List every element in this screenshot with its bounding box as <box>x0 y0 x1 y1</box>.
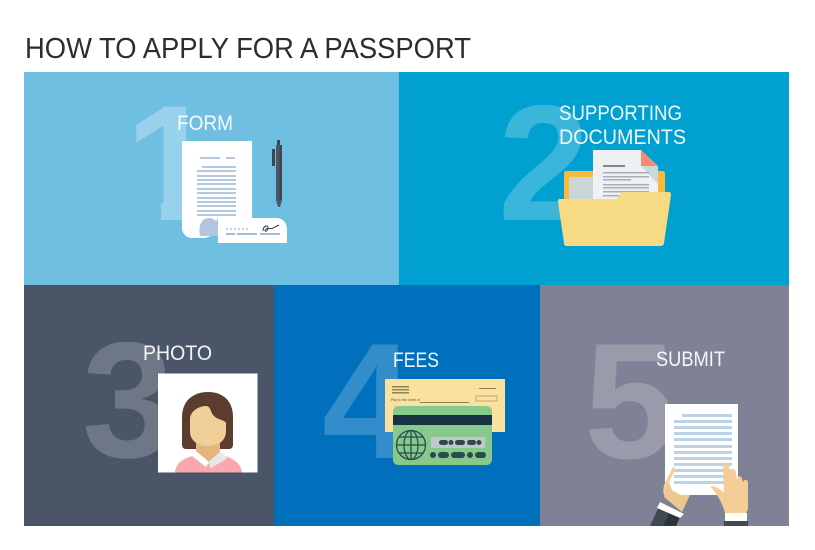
title: HOW TO APPLY FOR A PASSPORT <box>25 33 471 65</box>
icon: portrait photo <box>158 374 258 472</box>
heading: supporting documents <box>559 102 686 149</box>
number 5: 5 <box>584 309 676 493</box>
heading: supporting documents: SUPPORTING <box>559 102 682 125</box>
icon: form document <box>182 141 287 243</box>
icon: pen <box>272 140 282 210</box>
heading: fees: FEES <box>393 349 439 372</box>
icon: cheque: Pay to the order of <box>391 398 420 402</box>
panel: step 1 form <box>24 71 399 285</box>
heading: supporting documents: DOCUMENTS <box>559 126 686 149</box>
panel: step 2 supporting documents <box>399 71 789 285</box>
number 1: 1 <box>125 71 217 255</box>
number 4: 4 <box>322 309 414 493</box>
heading: form: FORM <box>177 112 233 135</box>
heading: submit: SUBMIT <box>656 348 725 371</box>
heading: photo: PHOTO <box>143 342 212 365</box>
number 3: 3 <box>82 308 174 492</box>
icon: document held in hands <box>650 404 748 526</box>
panel: step 3 photo <box>24 285 274 526</box>
icon: folder with documents <box>558 150 671 246</box>
panel: step 4 fees <box>274 285 540 526</box>
icon: cheque <box>385 379 505 432</box>
panel: step 5 submit <box>540 285 789 526</box>
icon: credit card <box>393 406 492 465</box>
number 2: 2 <box>498 71 590 255</box>
